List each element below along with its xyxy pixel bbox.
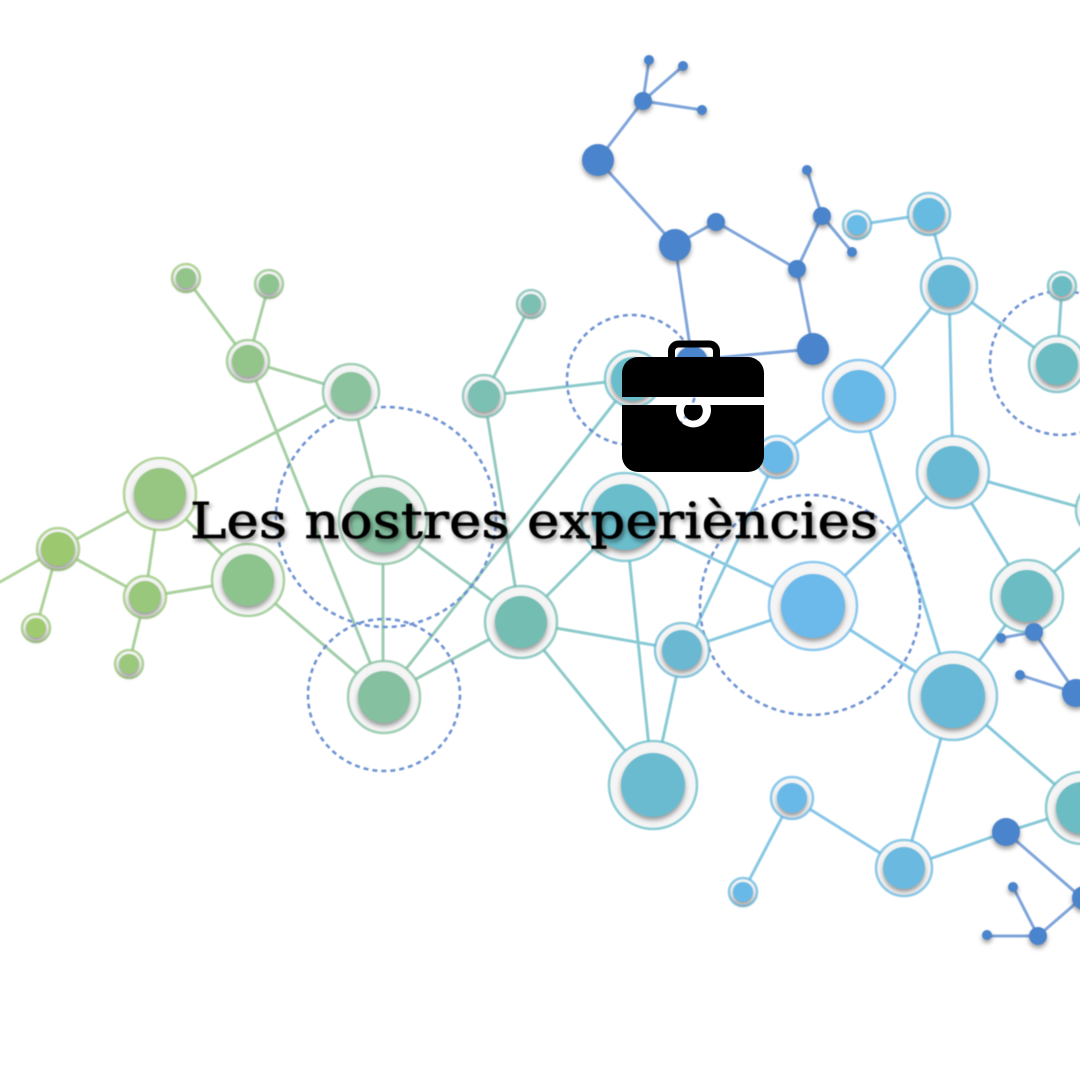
- dashed circles: [276, 291, 1080, 771]
- title: Les nostres experiències: [190, 492, 878, 550]
- dark blue nodes: [582, 55, 1080, 945]
- network links: green and teal: [0, 214, 1080, 892]
- green nodes: [22, 264, 427, 733]
- network links: dark blue: [598, 60, 1080, 936]
- light blue nodes: [729, 193, 1080, 906]
- icon: briefcase: [622, 344, 764, 472]
- teal nodes: [463, 290, 709, 829]
